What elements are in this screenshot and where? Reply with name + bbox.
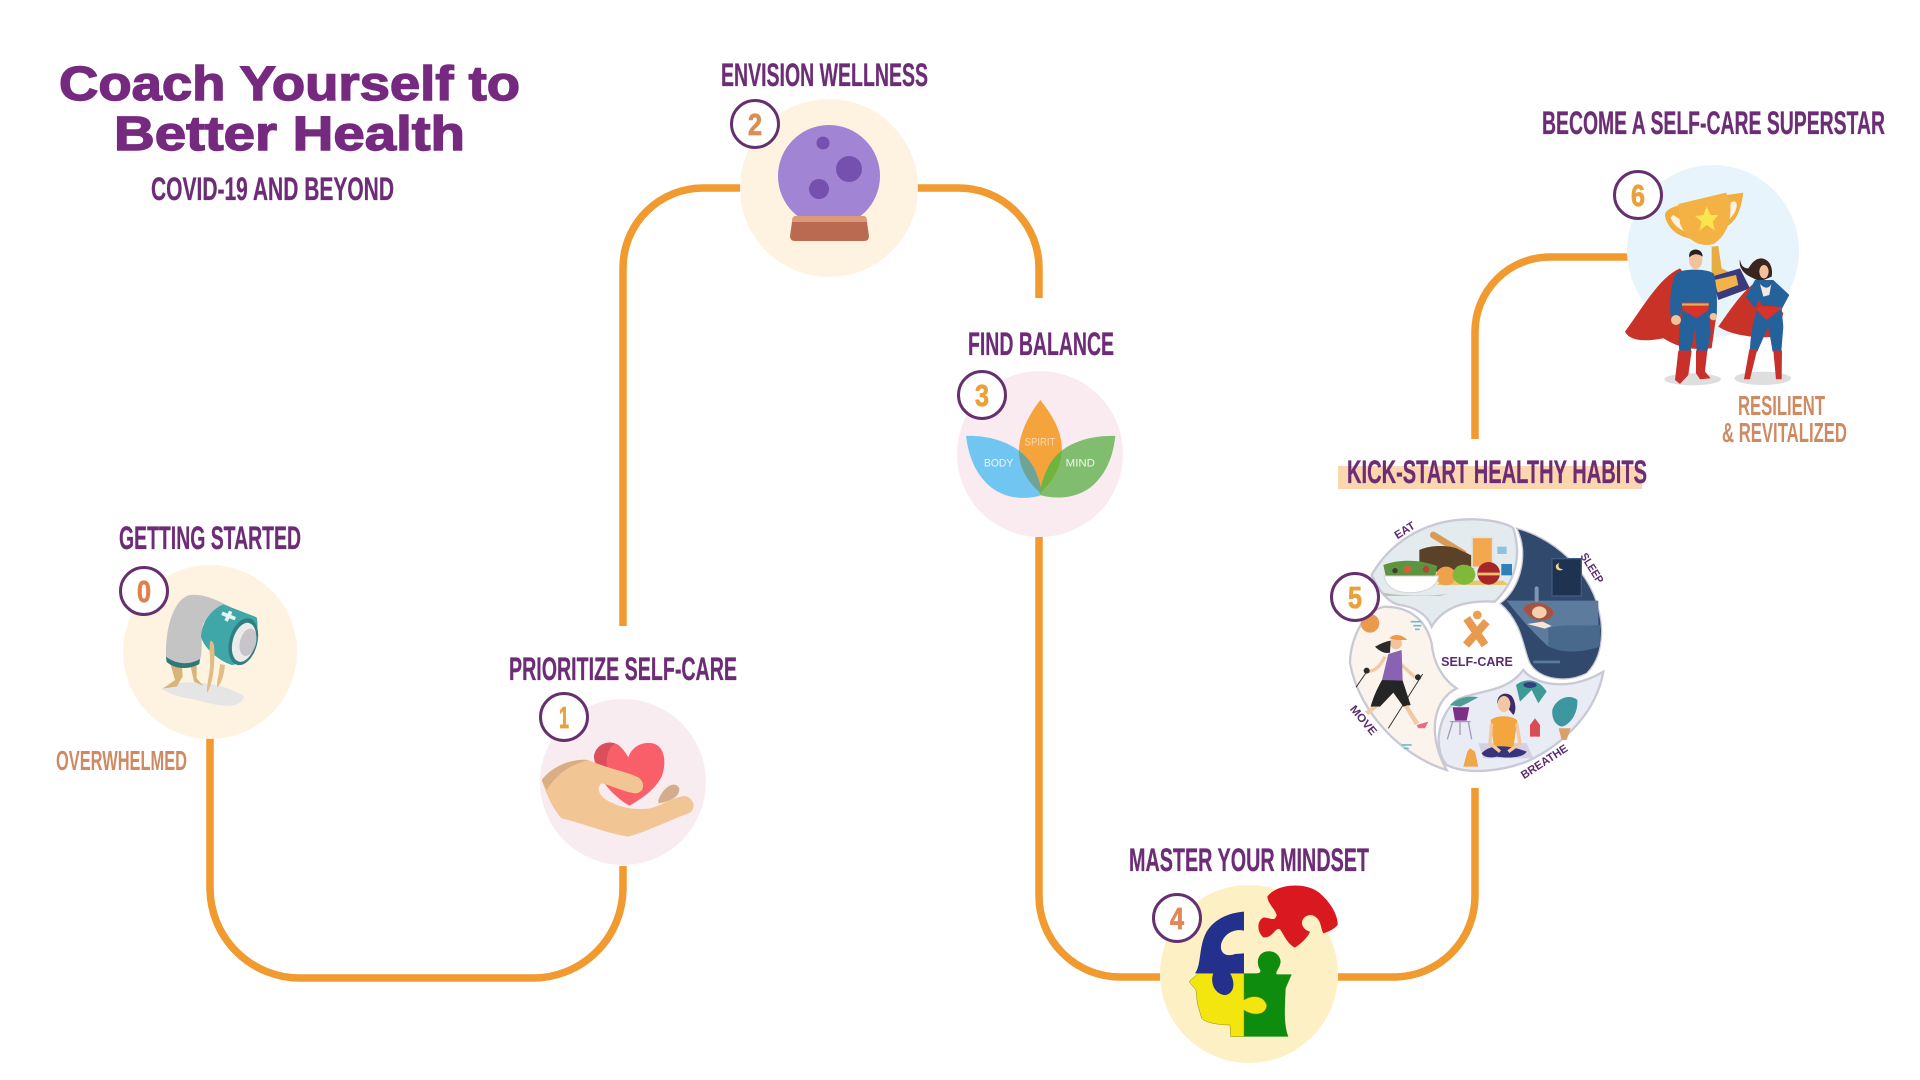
badge 5: [1332, 574, 1378, 620]
step 2: envision wellness: ENVISION WELLNESS: [721, 57, 928, 93]
badge 0: 0: [137, 574, 151, 609]
wheel labels: BREATHE: [1519, 742, 1571, 782]
label: resilient and revitalized: RESILIENT: [1738, 390, 1825, 421]
wheel labels: EAT: [1393, 520, 1418, 542]
segment: eat: [1372, 519, 1517, 627]
hub: self-care logo: [1441, 611, 1513, 669]
segment: breathe: [1439, 670, 1603, 771]
step 5: kick-start healthy habits: KICK-START HEALTHY HABITS: [1347, 454, 1647, 490]
wheel labels: SLEEP: [1577, 551, 1605, 586]
icon: tired battery: [162, 595, 263, 706]
label: resilient and revitalized: [1722, 390, 1847, 448]
icon: three petal lotus: MIND: [1066, 458, 1095, 470]
self-care wheel: [1347, 519, 1605, 782]
badge 0: [120, 568, 168, 614]
title: Coach Yourself to: [59, 58, 520, 111]
step 1: prioritize self-care: PRIORITIZE SELF-CARE: [509, 651, 737, 687]
wheel labels: [1347, 520, 1605, 782]
step 4: master your mindset: [1129, 842, 1369, 1063]
hub: self-care logo: SELF-CARE: [1441, 655, 1513, 669]
icon: hand holding heart: [542, 742, 694, 837]
icon: puzzle head: [1189, 886, 1338, 1037]
icon: three petal lotus: BODY: [984, 458, 1013, 470]
icon: trophy and superheroes: [1625, 193, 1791, 385]
connector path from step 0 to step 6: [210, 188, 1628, 978]
icon: three petal lotus: SPIRIT: [1025, 437, 1056, 449]
badge 3: 3: [975, 378, 989, 413]
icon: three petal lotus: [966, 400, 1115, 498]
badge 5: 5: [1348, 580, 1362, 615]
badge 2: 2: [748, 107, 762, 142]
segment: move: [1350, 607, 1457, 770]
wheel labels: MOVE: [1347, 704, 1379, 738]
step 0: getting started: [119, 520, 301, 739]
step 5: kick-start healthy habits: [1338, 454, 1647, 490]
badge 4: 4: [1170, 901, 1185, 936]
badge 1: [540, 694, 588, 740]
badge 1: 1: [559, 700, 569, 735]
subtitle: COVID-19 AND BEYOND: [151, 171, 394, 207]
step 0: getting started: GETTING STARTED: [119, 520, 301, 556]
badge 6: [1614, 172, 1662, 218]
step 3: find balance: [957, 326, 1123, 537]
title: Better Health: [114, 108, 465, 161]
step 1: prioritize self-care: [509, 651, 737, 865]
badge 3: [958, 372, 1006, 418]
badge 2: [732, 100, 778, 148]
badge 6: 6: [1631, 178, 1645, 213]
step 2: envision wellness: [721, 57, 928, 277]
segment: sleep: [1500, 528, 1602, 679]
badge 4: [1154, 894, 1200, 942]
heading highlight: [1338, 466, 1642, 489]
label: overwhelmed: OVERWHELMED: [56, 745, 187, 776]
icon: crystal ball: [778, 125, 880, 241]
step 4: master your mindset: MASTER YOUR MINDSET: [1129, 842, 1369, 878]
step 6: self-care superstar: [1542, 105, 1885, 385]
step 3: find balance: FIND BALANCE: [968, 326, 1114, 362]
title: [59, 58, 520, 161]
